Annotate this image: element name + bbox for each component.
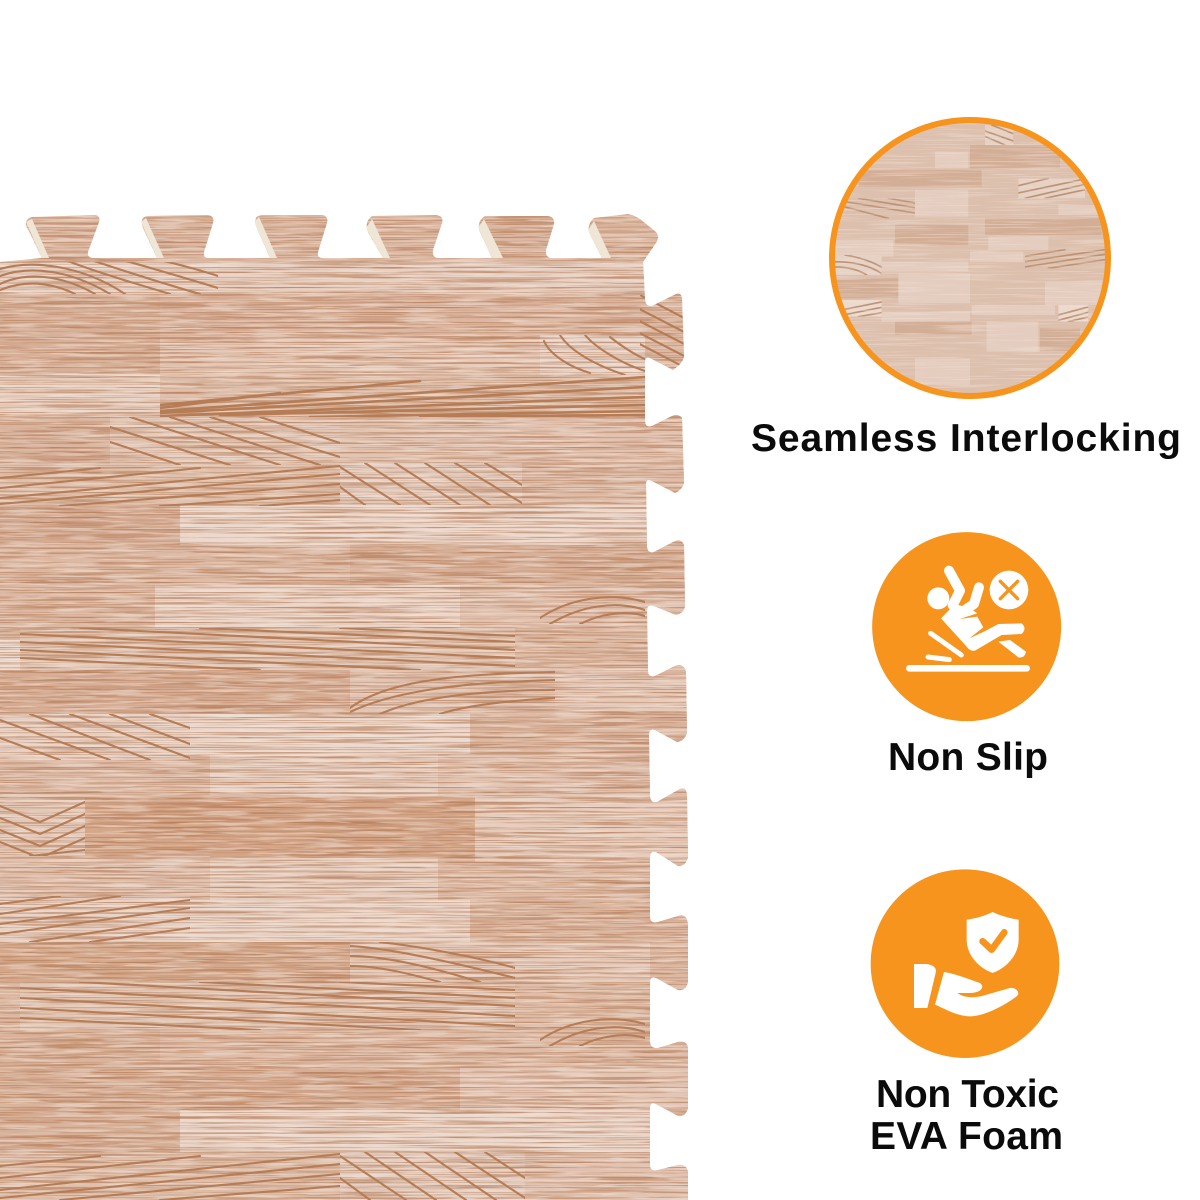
label: seamless interlocking: Seamless Interlocking xyxy=(751,417,1181,460)
label: non slip: Non Slip xyxy=(888,736,1048,779)
wood grain interlocking foam mat xyxy=(0,200,700,1200)
label: non toxic EVA foam xyxy=(870,1073,1063,1158)
panel: non slip xyxy=(872,532,1061,779)
icon: falling person xyxy=(872,532,1061,721)
panel: non toxic EVA foam xyxy=(870,869,1063,1158)
mat grain figures xyxy=(0,258,690,1200)
label: non toxic EVA foam: Non Toxic xyxy=(876,1073,1059,1116)
label: non toxic EVA foam: EVA Foam xyxy=(870,1115,1063,1158)
cut tab foam edges xyxy=(26,217,611,258)
mat plank tones xyxy=(0,262,695,1200)
orange ring xyxy=(832,120,1108,396)
icon: hand with shield xyxy=(871,869,1059,1058)
panel: seamless interlocking xyxy=(751,118,1181,460)
wood inset circle xyxy=(829,118,1111,400)
